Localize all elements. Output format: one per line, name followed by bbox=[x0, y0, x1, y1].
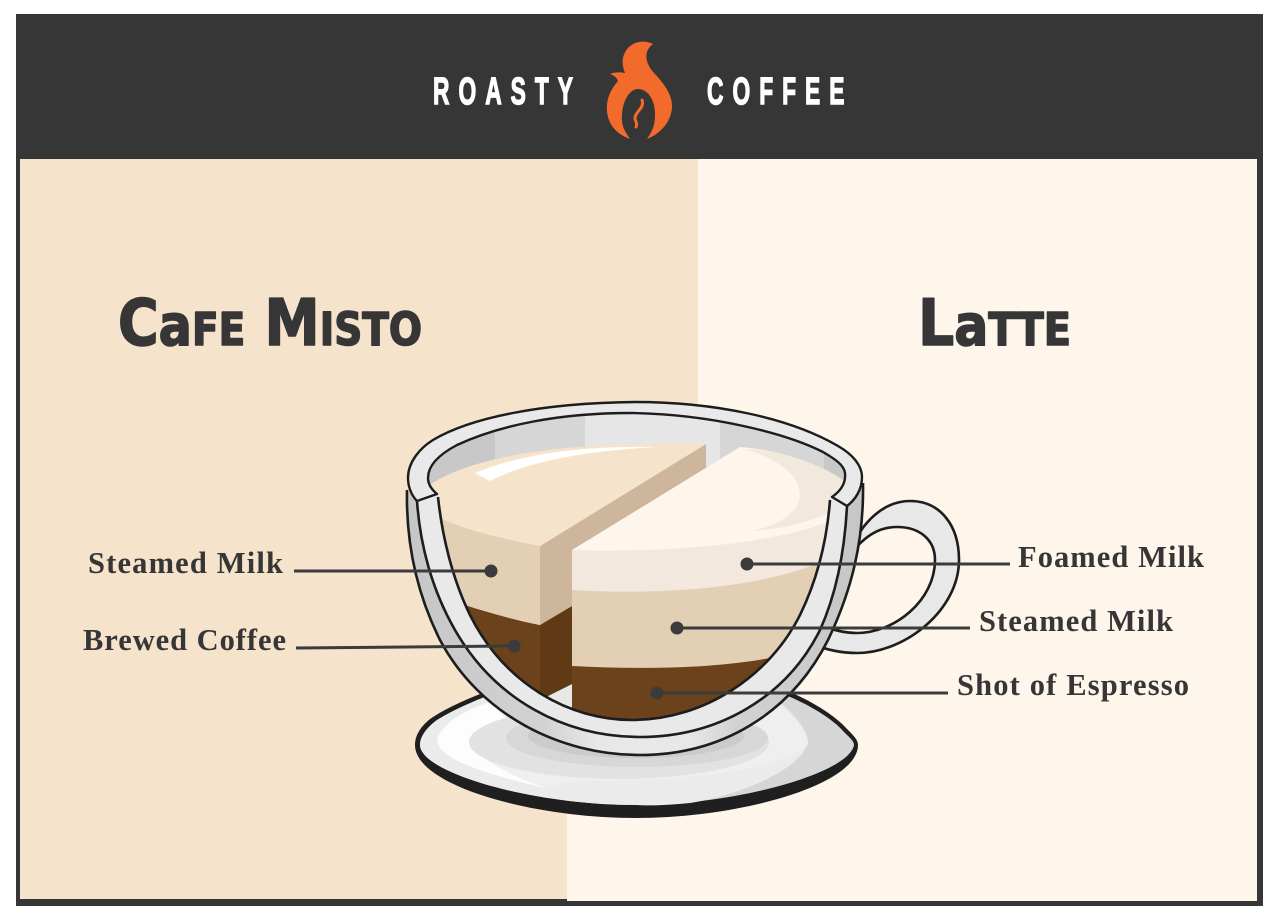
label: foamed milk: Foamed Milk bbox=[1018, 540, 1204, 574]
label: brewed coffee: Brewed Coffee bbox=[83, 623, 286, 657]
latte: foam crescent bbox=[745, 449, 850, 531]
panel: cafe misto background bbox=[20, 159, 698, 899]
label: steamed milk left: Steamed Milk bbox=[88, 546, 283, 580]
logo text: coffee: COFFEE bbox=[707, 70, 853, 112]
leader: foamed milk bbox=[740, 558, 1010, 570]
header bar bbox=[16, 14, 1263, 159]
illustration: saucer bbox=[415, 690, 858, 818]
leader: brewed coffee bbox=[296, 640, 520, 652]
leader: steamed milk right bbox=[670, 622, 970, 634]
latte: steamed milk layer bbox=[572, 566, 818, 668]
logo text: roasty: ROASTY bbox=[433, 70, 582, 112]
cup rim bbox=[408, 402, 862, 506]
heading: cafe misto: Cafe Misto bbox=[118, 287, 422, 361]
highlight on milk bbox=[475, 447, 657, 481]
back wall bbox=[429, 414, 844, 694]
heading: latte: Latte bbox=[918, 287, 1071, 361]
logo icon: flame and bean bbox=[607, 42, 672, 139]
latte: top surface bbox=[572, 447, 850, 551]
leader: shot of espresso bbox=[650, 686, 948, 700]
latte: shot of espresso layer bbox=[572, 658, 768, 719]
leader: steamed milk left bbox=[294, 564, 498, 578]
cafe misto: milk top surface bbox=[428, 444, 706, 546]
illustration: cup interior bbox=[429, 414, 844, 719]
cafe misto: steamed milk layer bbox=[442, 519, 540, 625]
label: steamed milk right: Steamed Milk bbox=[979, 604, 1173, 638]
illustration: cup handle bbox=[815, 501, 959, 653]
latte: foamed milk layer bbox=[572, 522, 826, 592]
cafe misto: brewed coffee layer bbox=[467, 606, 572, 696]
label: shot of espresso: Shot of Espresso bbox=[957, 668, 1189, 702]
panel: latte background bbox=[567, 159, 1257, 901]
illustration: cup walls bbox=[407, 402, 863, 755]
